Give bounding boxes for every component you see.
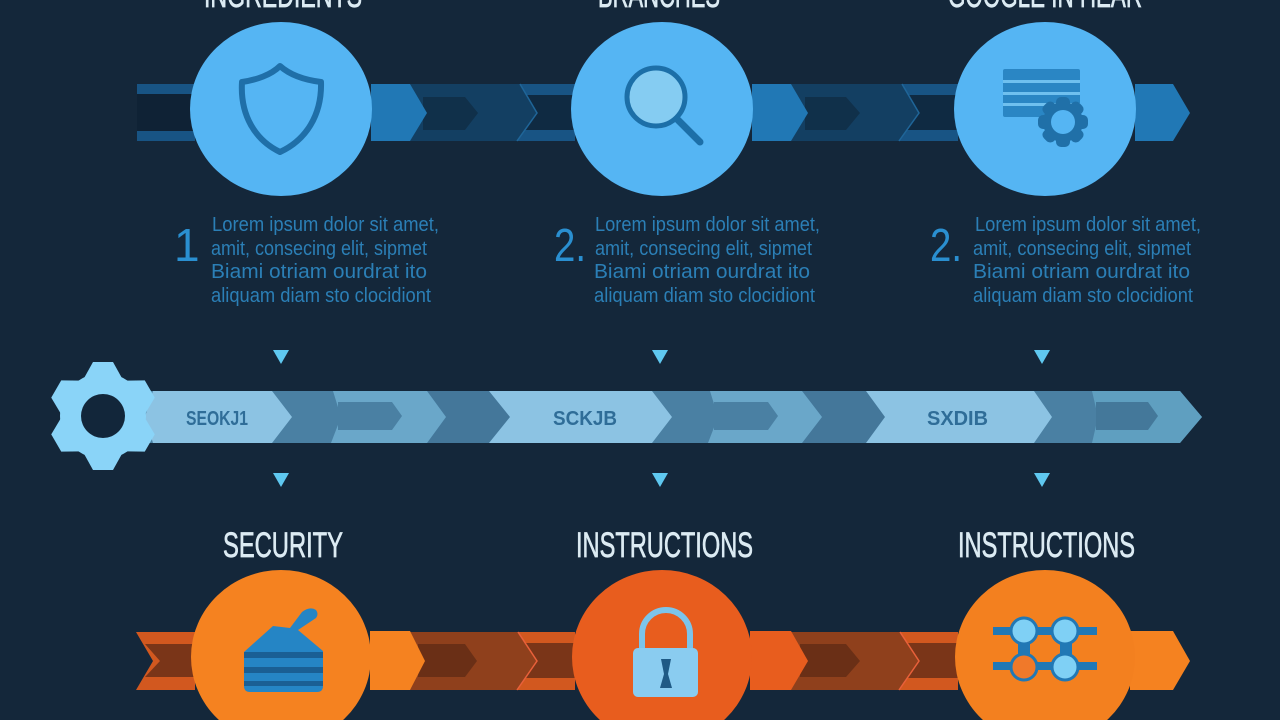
circle 4 with cake icon — [191, 570, 371, 720]
text block 3: Lorem ipsum dolor sit amet, — [975, 214, 1201, 236]
step number 1: 1 — [174, 219, 200, 271]
lower small arrows — [273, 473, 1050, 487]
text block 2: amit, consecing elit, sipmet — [595, 238, 812, 260]
text block 2: aliquam diam sto clocidiont — [594, 285, 815, 307]
text block 2: Lorem ipsum dolor sit amet, — [595, 214, 820, 236]
text block 1: aliquam diam sto clocidiont — [211, 285, 431, 307]
circle 5 with lock icon — [572, 570, 752, 720]
icon: panel and gear — [1003, 69, 1088, 147]
text block 3: Biami otriam ourdrat ito — [973, 261, 1190, 283]
heading: instructions 1: INSTRUCTIONS — [576, 526, 753, 565]
circle 3 with settings panel icon — [954, 22, 1136, 196]
middle arrow band — [145, 391, 1202, 443]
text block 2: Biami otriam ourdrat ito — [594, 261, 810, 283]
icon: padlock — [633, 610, 698, 697]
icon: shield — [242, 66, 321, 152]
step number 3: 2. — [930, 219, 962, 271]
text block 1: amit, consecing elit, sipmet — [211, 238, 427, 260]
icon: magnifier — [627, 68, 700, 142]
icon: gear — [46, 362, 160, 470]
icon: striped wedge — [244, 608, 323, 692]
step number 2: 2. — [554, 219, 586, 271]
text block 3 — [973, 214, 1201, 307]
circle 6 with nodes icon — [955, 570, 1135, 720]
band label 1: SEOKJ1 — [186, 408, 248, 430]
upper small arrows — [273, 350, 1050, 364]
circle 1 with shield icon — [190, 22, 372, 196]
text block 1 — [211, 214, 439, 307]
bottom arrow band — [136, 631, 1190, 690]
heading: security: SECURITY — [223, 526, 343, 565]
band label 2: SCKJB — [553, 408, 617, 430]
band label 3: SXDIB — [927, 408, 988, 430]
text block 2 — [594, 214, 820, 307]
top arrow band — [137, 84, 1190, 141]
text block 3: amit, consecing elit, sipmet — [973, 238, 1191, 260]
icon: connected nodes — [993, 618, 1097, 680]
heading: instructions 2: INSTRUCTIONS — [958, 526, 1135, 565]
text block 1: Lorem ipsum dolor sit amet, — [212, 214, 439, 236]
text block 1: Biami otriam ourdrat ito — [211, 261, 427, 283]
circle 2 with magnifier icon — [571, 22, 753, 196]
text block 3: aliquam diam sto clocidiont — [973, 285, 1193, 307]
